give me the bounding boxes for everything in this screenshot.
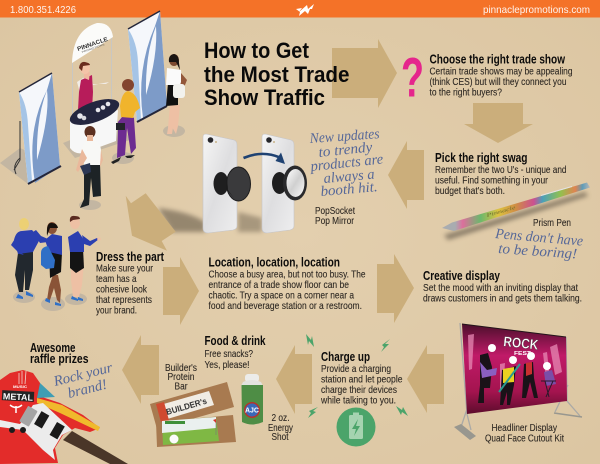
handwritten note: trendy products: products are xyxy=(309,151,385,175)
icon: charging battery xyxy=(336,408,376,446)
rock fest logo: FEST xyxy=(514,351,532,357)
handwritten note: rock your brand xyxy=(51,360,115,402)
arrow: display to charge xyxy=(407,345,444,413)
caption: builder's protein bar: Builder's xyxy=(165,362,197,374)
arrow: location to creative xyxy=(377,254,414,323)
caption: headliner display: Quad Face Cutout Kit xyxy=(485,432,564,444)
band members with face cutouts xyxy=(478,344,556,405)
handwritten note: pens: Pens don't have xyxy=(494,226,584,250)
product image: rock fest display xyxy=(454,323,582,440)
flag banner with logo: PINNACLE xyxy=(77,37,109,53)
text block: choose the right trade show: (think CES) but will they connect you xyxy=(430,76,567,88)
product image: electric guitar: METAL xyxy=(3,391,34,403)
heading: awesome raffle prizes: raffle prizes xyxy=(30,352,89,366)
text block: charge up: station and let people xyxy=(321,374,403,386)
text block: location: Choose a busy area, but not too busy. The xyxy=(208,268,366,280)
bar: builder's: BUILDER's xyxy=(165,396,208,417)
handwritten note: rock your brand: Rock your xyxy=(51,360,115,390)
person: bag carrier xyxy=(41,222,62,306)
caption: energy shot xyxy=(268,412,294,443)
text block: charge up xyxy=(320,350,403,406)
person: woman in white top xyxy=(166,54,187,134)
text block: charge up: charge their devices xyxy=(321,384,397,396)
text block: charge up: Charge up xyxy=(321,350,370,364)
text block: charge up: while talking to you. xyxy=(320,394,396,406)
person: attendee in yellow xyxy=(111,79,140,164)
product image: energy shot bottle: AJC xyxy=(245,408,259,414)
text block: dress the part xyxy=(96,250,165,316)
handwritten note: pens xyxy=(494,226,584,263)
text block: dress the part: your brand. xyxy=(96,304,137,316)
text block: pick the right swag: Remember the two U's - unique and xyxy=(435,164,567,176)
product image: energy shot bottle xyxy=(241,374,263,424)
phone number: 1.800.351.4226 xyxy=(10,4,76,16)
caption: prism pen: Prism Pen xyxy=(533,217,571,229)
arrow: dress to location xyxy=(163,257,199,325)
handwritten note: trendy products: New updates xyxy=(308,126,380,147)
caption: builder's protein bar: Bar xyxy=(174,380,188,392)
handwritten note: trendy products: always a xyxy=(323,167,375,187)
product image: prism pen: Pinnacle xyxy=(485,205,518,219)
person: blonde xyxy=(11,218,48,299)
caption: energy shot: Energy xyxy=(268,422,294,434)
text block: pick the right swag: Pick the right swag xyxy=(435,151,528,165)
caption: PopSocket Pop Mirror: PopSocket xyxy=(315,205,355,217)
text block: dress the part: team has a xyxy=(96,273,137,285)
website: pinnaclepromotions.com xyxy=(483,4,590,16)
arrow: swag to popsocket xyxy=(388,141,424,209)
title xyxy=(204,38,350,110)
left banner xyxy=(14,73,61,184)
text block: location: food and beverage station or a restroom. xyxy=(208,300,362,312)
text block: location: chaotic. Try a space on a corner near a xyxy=(208,290,354,302)
text block: dress the part: cohesive look xyxy=(96,284,148,296)
text block: pick the right swag xyxy=(435,151,567,197)
text block: pick the right swag: useful. Find something in your xyxy=(435,174,548,186)
text block: choose the right trade show xyxy=(430,52,573,98)
text block: dress the part: that represents xyxy=(96,294,152,306)
handwritten note: rock your brand: brand! xyxy=(66,377,109,402)
handwritten note: trendy products: booth hit. xyxy=(320,179,378,200)
illustration: team in blue xyxy=(11,216,101,311)
text block: food and drink: Yes, please! xyxy=(204,359,250,371)
text block: choose the right trade show: Choose the right trade show xyxy=(430,52,565,66)
arrow: food to raffle xyxy=(122,335,159,404)
arrow: curved navy xyxy=(244,152,285,164)
heading: awesome raffle prizes xyxy=(30,341,89,366)
product image: electric guitar xyxy=(0,370,128,464)
caption: builder's protein bar: Protein xyxy=(168,371,195,383)
phone two xyxy=(262,134,307,233)
product image: phones with PopSocket xyxy=(158,134,307,233)
caption: PopSocket Pop Mirror xyxy=(315,205,355,227)
caption: PopSocket Pop Mirror: Pop Mirror xyxy=(315,215,354,227)
arrow: charge to food xyxy=(276,345,312,414)
caption: headliner display xyxy=(485,422,564,444)
title: the Most Trade xyxy=(204,62,350,87)
title: How to Get xyxy=(204,38,309,63)
text block: dress the part: Make sure your xyxy=(96,262,153,274)
bar: golf xyxy=(156,415,236,447)
product image: protein bars xyxy=(150,382,236,447)
display frame xyxy=(454,323,582,440)
person: staffer in pink xyxy=(77,62,109,110)
counter with product samples xyxy=(67,94,122,153)
text block: pick the right swag: budget that's both. xyxy=(435,185,505,197)
product image: electric guitar: MUSIC xyxy=(13,384,27,389)
arrow: choose to swag xyxy=(464,103,533,143)
arrow: title to choose xyxy=(332,39,397,108)
header bar xyxy=(0,0,600,18)
text block: food and drink: Food & drink xyxy=(204,334,266,348)
person: dark updo xyxy=(68,216,101,301)
handwritten note: trendy products xyxy=(308,126,385,200)
person: man in white shirt xyxy=(76,126,103,208)
text block: dress the part: Dress the part xyxy=(96,250,165,264)
text block: creative display xyxy=(423,269,582,304)
text block: creative display: Creative display xyxy=(423,269,500,283)
text block: food and drink: Free snacks? xyxy=(204,348,253,360)
icon: lightning bolts xyxy=(306,334,408,418)
text block: food and drink xyxy=(204,334,266,371)
product image: prism pen xyxy=(442,182,590,240)
icon: pink question mark: ? xyxy=(401,46,424,108)
phone one xyxy=(203,134,250,233)
caption: energy shot: 2 oz. xyxy=(272,412,290,424)
text block: location: Location, location, location xyxy=(208,256,340,270)
flag banner with logo: PROMOTIONS xyxy=(81,43,105,54)
handwritten note: pens: to be boring! xyxy=(498,241,578,263)
caption: headliner display: Headliner Display xyxy=(492,422,558,434)
icon: brand logo xyxy=(296,4,314,16)
title: Show Traffic xyxy=(204,85,325,110)
caption: builder's protein bar xyxy=(165,362,197,392)
printed graphic xyxy=(462,324,567,414)
caption: energy shot: Shot xyxy=(272,431,289,443)
arrow: popsocket to dress xyxy=(126,193,176,251)
handwritten note: trendy products: to trendy xyxy=(318,139,374,161)
text block: location: entrance of a trade show floor can be xyxy=(208,279,349,291)
rock fest logo: ROCK xyxy=(503,333,539,353)
illustration: trade show booth xyxy=(0,11,187,210)
text block: charge up: Provide a charging xyxy=(321,363,391,375)
text block: location xyxy=(208,256,366,312)
text block: choose the right trade show: to the right buyers? xyxy=(430,86,502,98)
heading: awesome raffle prizes: Awesome xyxy=(30,341,76,355)
flag banner with logo xyxy=(72,23,113,118)
right banner xyxy=(128,11,167,122)
